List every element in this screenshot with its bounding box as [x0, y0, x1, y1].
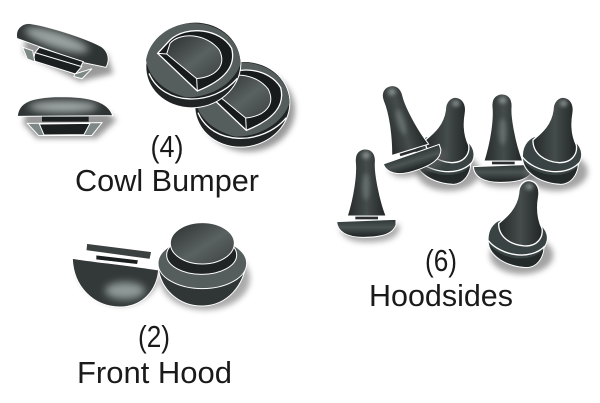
group: front hood parts — [72, 223, 250, 310]
label: Cowl Bumper: Cowl Bumper — [75, 163, 259, 198]
icon: halved front hood bumper — [72, 243, 160, 307]
icon: upper round bumper — [139, 15, 248, 115]
icon: whole front hood bumper — [158, 223, 250, 310]
icon: standalone peg — [337, 149, 399, 242]
icon: peg 4 with flanges — [415, 97, 480, 191]
icon: leaning peg — [362, 76, 449, 184]
icon: lower round bumper — [188, 54, 297, 155]
group: hoodside parts — [337, 76, 588, 274]
label: quantity (2): (2) — [138, 319, 170, 354]
icon: upright peg — [473, 94, 536, 187]
label: quantity (6): (6) — [425, 243, 457, 278]
label: quantity (4): (4) — [150, 129, 184, 164]
group: cowl bumper parts — [16, 15, 297, 155]
icon: peg 5 with flanges — [522, 97, 588, 191]
label: Hoodsides: Hoodsides — [369, 278, 513, 313]
icon: tilted bumper side view — [16, 22, 113, 82]
label: Front Hood: Front Hood — [77, 355, 232, 390]
icon: level bumper side view — [17, 97, 117, 138]
icon: front peg with flanges — [488, 181, 553, 274]
